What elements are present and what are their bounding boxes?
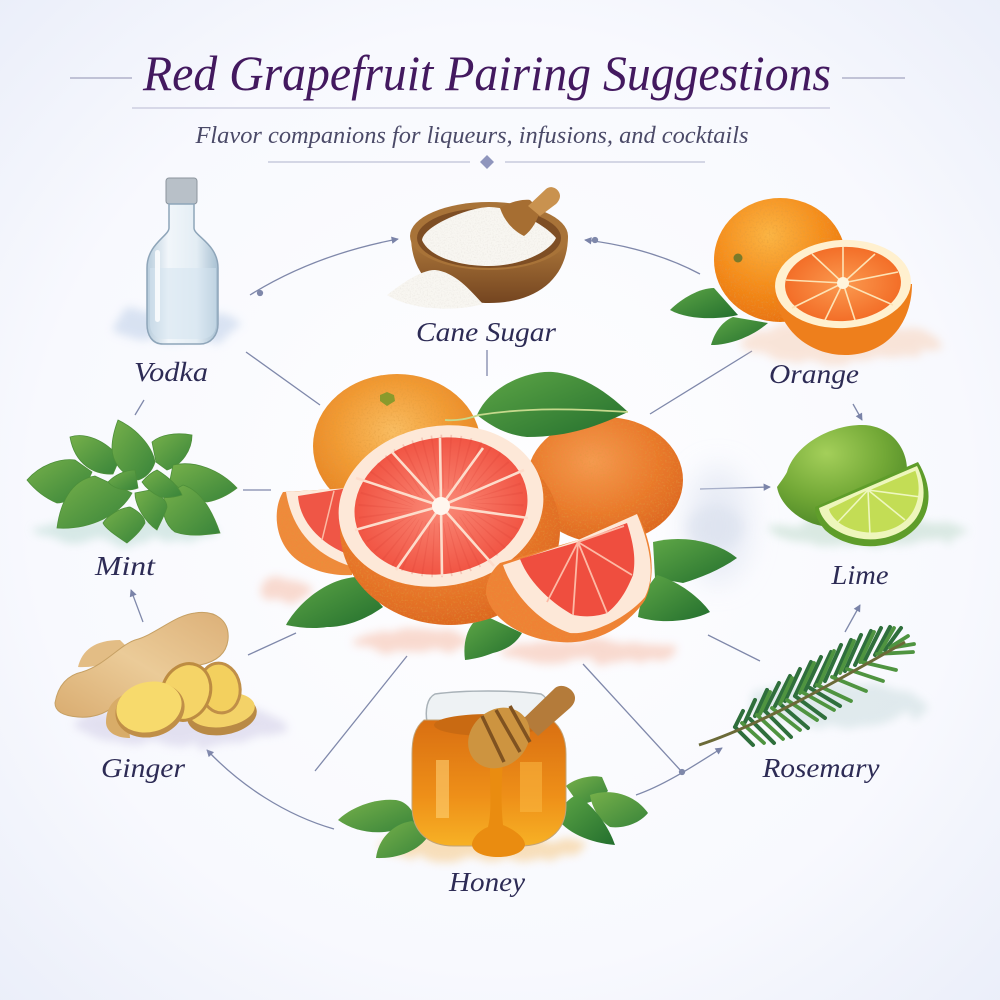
label: orange: Orange bbox=[769, 359, 859, 389]
right wedge bbox=[486, 514, 652, 642]
icon: mint bbox=[27, 420, 237, 543]
subtitle: Flavor companions for liqueurs, infusions, and cocktails bbox=[194, 123, 749, 149]
label: honey: Honey bbox=[448, 867, 525, 897]
label: ginger: Ginger bbox=[101, 753, 186, 783]
icon: ginger bbox=[55, 612, 285, 745]
label: vodka: Vodka bbox=[134, 357, 208, 387]
icon: vodka bottle bbox=[110, 178, 240, 344]
icon: orange bbox=[670, 198, 940, 363]
icon: cane sugar bowl bbox=[387, 187, 568, 309]
connector arrows bbox=[131, 238, 862, 829]
main cut grapefruit bbox=[326, 409, 560, 625]
title: Red Grapefruit Pairing Suggestions bbox=[142, 45, 831, 101]
label: cane sugar: Cane Sugar bbox=[416, 317, 557, 347]
icon: rosemary bbox=[699, 627, 925, 745]
back left grapefruit bbox=[313, 374, 481, 518]
bottom leaves bbox=[286, 539, 737, 660]
left wedge bbox=[277, 488, 352, 575]
title rules and diamond ornament bbox=[70, 78, 905, 169]
top leaf bbox=[445, 372, 628, 437]
back right grapefruit bbox=[527, 417, 683, 543]
central grapefruit group bbox=[259, 372, 750, 662]
label: rosemary: Rosemary bbox=[761, 753, 880, 783]
icon: honey jar bbox=[338, 686, 648, 861]
label: mint: Mint bbox=[94, 551, 157, 581]
icon: lime bbox=[687, 425, 968, 550]
watercolor splash bbox=[259, 578, 680, 662]
label: lime: Lime bbox=[830, 560, 889, 590]
